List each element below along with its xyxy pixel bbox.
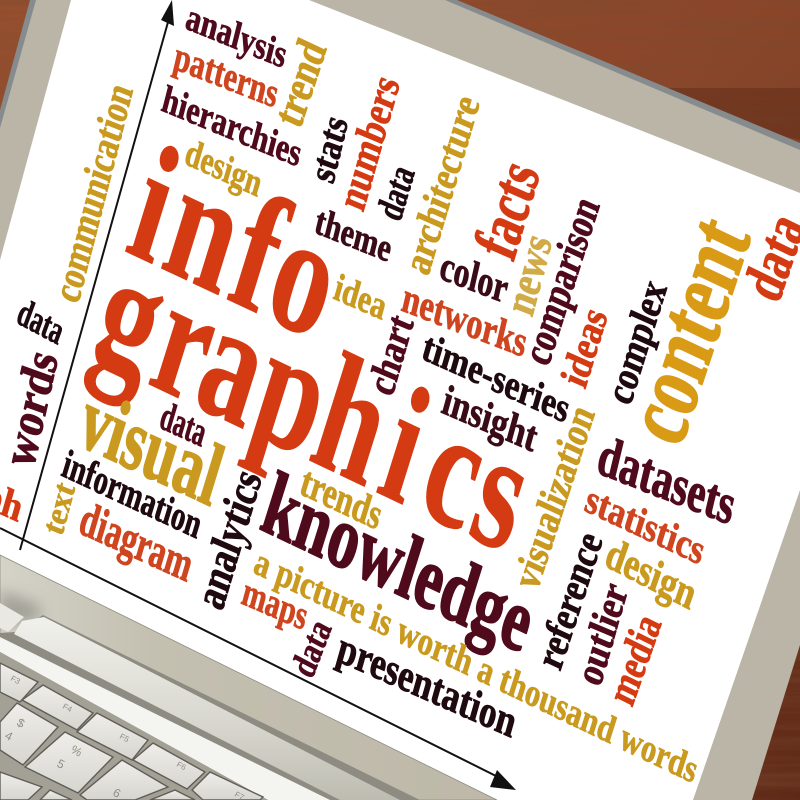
word: visualization: visualization — [504, 398, 603, 596]
word: media: media — [599, 607, 671, 712]
key F7 — [192, 772, 263, 800]
legend 4: 4 — [3, 728, 15, 744]
word: patterns: patterns — [170, 33, 283, 117]
legend F6: F6 — [175, 760, 188, 772]
word: maps: maps — [238, 568, 313, 639]
word: hierarchies: hierarchies — [158, 78, 306, 176]
key F6 — [133, 743, 205, 789]
word: information: information — [57, 440, 207, 547]
vertical axis arrow — [20, 0, 174, 550]
word: diagram: diagram — [74, 492, 199, 593]
word: idea: idea — [330, 266, 391, 329]
word: news: news — [496, 227, 561, 322]
word: ideas: ideas — [552, 301, 616, 394]
key F5 — [77, 713, 148, 760]
laptop hinge — [0, 615, 420, 800]
word: graphics: graphics — [77, 214, 551, 589]
word: design (top): design — [180, 131, 267, 206]
keyboard keys — [0, 663, 263, 800]
word: datasets: datasets — [592, 424, 741, 538]
legend dollar: $ — [15, 715, 27, 731]
key lower row middle — [40, 790, 72, 800]
word: insight: insight — [437, 376, 543, 462]
word: comparison: comparison — [514, 190, 609, 372]
legend 5: 5 — [55, 756, 67, 772]
word: design (right): design — [600, 528, 703, 619]
chart axes — [0, 0, 516, 790]
word: info: info — [112, 108, 361, 376]
word: content: content — [606, 201, 769, 459]
legend F3: F3 — [9, 674, 22, 686]
word: analytics: analytics — [186, 462, 271, 616]
word: reference: reference — [527, 525, 611, 676]
legend percent: % — [69, 742, 85, 760]
key legends — [3, 674, 246, 800]
keyboard tray — [0, 652, 268, 800]
word: chart: chart — [359, 307, 422, 402]
key F4 — [22, 685, 93, 730]
key 6 — [80, 760, 168, 800]
word: architecture: architecture — [395, 88, 488, 281]
word: visual: visual — [69, 369, 234, 525]
word: knowledge: knowledge — [252, 453, 545, 672]
word: communication: communication — [44, 77, 142, 308]
word: color: color — [436, 242, 513, 313]
word: facts: facts — [462, 150, 553, 269]
word: data (upper middle): data — [370, 159, 423, 227]
word: outlier: outlier — [567, 576, 636, 692]
key 4 — [0, 703, 58, 765]
word: time-series: time-series — [417, 323, 575, 432]
word: trend: trend — [265, 31, 336, 134]
key 5 — [25, 732, 113, 793]
laptop base band — [0, 637, 330, 800]
word: data (left): data — [12, 291, 70, 354]
laptop lower bezel — [0, 555, 497, 800]
word: statistics: statistics — [580, 475, 710, 574]
horizontal axis arrow — [0, 528, 516, 790]
word: networks: networks — [398, 274, 532, 367]
word: stats: stats — [302, 110, 357, 188]
word: text: text — [35, 477, 82, 540]
legend F4: F4 — [61, 702, 74, 714]
word: data (centre): data — [155, 392, 212, 456]
word: trends: trends — [295, 457, 388, 540]
soft shadow on lower bezel — [0, 590, 40, 625]
key at hinge corner — [0, 603, 24, 632]
word: presentation: presentation — [332, 622, 522, 748]
key lower row left — [0, 772, 42, 800]
word: data (bottom): data — [284, 613, 339, 684]
word: complex: complex — [597, 273, 675, 411]
legend F5: F5 — [118, 732, 131, 744]
key F3 — [0, 663, 38, 702]
word: theme: theme — [311, 200, 396, 271]
word: numbers: numbers — [329, 69, 409, 217]
key 7 — [150, 790, 195, 800]
